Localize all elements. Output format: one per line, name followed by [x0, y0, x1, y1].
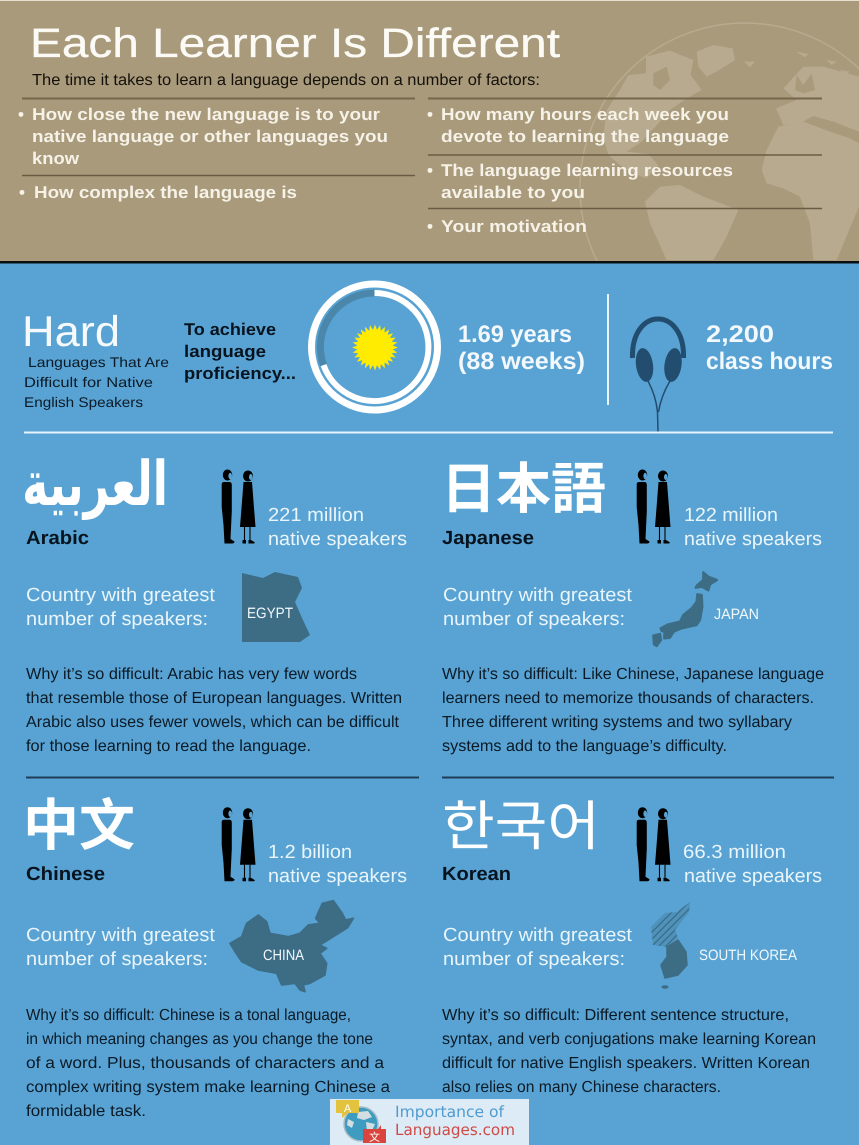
- speaker count: native speakers: [684, 866, 822, 887]
- description: Arabic also uses fewer vowels, which can be difficult: [26, 714, 400, 731]
- country label: Country with greatest: [26, 925, 216, 946]
- country label: [26, 585, 216, 630]
- icon: headphones: [632, 319, 684, 432]
- icon: globe with speech bubbles: A: [344, 1103, 352, 1115]
- description: Why it’s so difficult: Arabic has very few words: [26, 666, 357, 683]
- heading: hard: Difficult for Native: [24, 374, 153, 390]
- stat: years: [458, 321, 585, 375]
- stat: class hours: class hours: [706, 348, 833, 375]
- list: right factors: •: [427, 105, 433, 124]
- description: learners need to memorize thousands of characters.: [442, 690, 814, 707]
- description: Why it’s so difficult: Like Chinese, Japanese language: [442, 666, 824, 683]
- heading: hard: Languages That Are: [28, 354, 169, 370]
- description: [26, 666, 402, 755]
- country label: number of speakers:: [26, 949, 208, 970]
- language name: Arabic: [26, 528, 89, 549]
- heading: hard: English Speakers: [24, 394, 143, 410]
- speaker count: 66.3 million: [683, 842, 786, 863]
- language name: Chinese: [26, 864, 105, 885]
- panel: korean: [442, 782, 822, 1096]
- title: Each Learner Is Different: [30, 20, 561, 66]
- list: right factors: Your motivation: [441, 217, 587, 236]
- country label: [443, 925, 633, 970]
- description: syntax, and verb conjugations make learning Korean: [442, 1031, 816, 1048]
- speaker count: [684, 505, 822, 550]
- list: right factors: The language learning resources: [441, 161, 733, 180]
- list: left factors: native language or other languages you: [32, 127, 388, 146]
- map: korea: [651, 902, 797, 989]
- map: japan: JAPAN: [714, 606, 759, 623]
- panel: chinese: [23, 781, 407, 1120]
- country label: Country with greatest: [443, 925, 633, 946]
- icon: people: [637, 470, 670, 544]
- language name: Korean: [442, 864, 511, 885]
- country label: Country with greatest: [443, 585, 633, 606]
- country label: [443, 585, 633, 630]
- icon: globe watermark: [579, 22, 859, 261]
- heading: arabic script: العربية: [22, 449, 168, 520]
- list: right factors: •: [427, 217, 433, 236]
- country label: number of speakers:: [26, 609, 208, 630]
- list: right factors: How many hours each week you: [441, 105, 729, 124]
- list: right factors: [427, 105, 733, 236]
- list: left factors: How complex the language is: [34, 183, 297, 202]
- description: [442, 1007, 816, 1096]
- chart: progress ring with sun: [312, 284, 438, 410]
- panel: japanese: [441, 444, 824, 755]
- icon: people: [222, 470, 256, 544]
- logo: importance of languages: Importance of: [395, 1103, 505, 1121]
- panel: hard languages background: [0, 261, 859, 1145]
- text: to achieve language proficiency: language: [184, 342, 266, 361]
- text: to achieve language proficiency: To achieve: [184, 320, 276, 339]
- icon: globe with speech bubbles: [336, 1100, 386, 1145]
- icon: globe with speech bubbles: 文: [369, 1129, 380, 1145]
- description: Why it’s so difficult: Different sentence structure,: [442, 1007, 789, 1024]
- description: Why it’s so difficult: Chinese is a tonal language,: [26, 1007, 351, 1024]
- list: right factors: •: [427, 161, 433, 180]
- stat: years: 1.69 years: [458, 321, 572, 348]
- heading: chinese script: 中文: [23, 781, 135, 862]
- description: that resemble those of European languages. Written: [26, 690, 402, 707]
- stat: class hours: [706, 321, 833, 375]
- map: japan: [653, 572, 759, 646]
- description: [26, 1007, 390, 1120]
- speaker count: 122 million: [684, 505, 778, 526]
- heading: hard: Hard: [22, 308, 120, 356]
- description: also relies on many Chinese characters.: [442, 1079, 721, 1096]
- description: formidable task.: [26, 1103, 146, 1120]
- country label: number of speakers:: [443, 949, 625, 970]
- list: right factors: available to you: [441, 183, 585, 202]
- icon: people: [637, 807, 670, 881]
- speaker count: 1.2 billion: [268, 842, 352, 863]
- intro sentence: The time it takes to learn a language depends on a number of factors:: [32, 72, 540, 89]
- description: systems add to the language’s difficulty.: [442, 738, 727, 755]
- icon: sun: [352, 324, 398, 370]
- country label: Country with greatest: [26, 585, 216, 606]
- speaker count: native speakers: [268, 866, 407, 887]
- heading: korean script: 한국어: [442, 782, 600, 861]
- map: china: [230, 901, 353, 992]
- description: difficult for native English speakers. Written Korean: [442, 1055, 810, 1072]
- logo: importance of languages: Languages.com: [395, 1121, 515, 1139]
- text: to achieve language proficiency: [184, 320, 296, 383]
- list: left factors: •: [18, 105, 24, 124]
- country label: [26, 925, 216, 970]
- description: in which meaning changes as you change the tone: [26, 1031, 373, 1048]
- description: complex writing system make learning Chinese a: [26, 1079, 390, 1096]
- speaker count: native speakers: [268, 529, 407, 550]
- description: [442, 666, 824, 755]
- map: china: CHINA: [263, 947, 304, 964]
- speaker count: [683, 842, 822, 887]
- text: to achieve language proficiency: proficiency...: [184, 364, 296, 383]
- panel: arabic: [22, 449, 407, 755]
- speaker count: 221 million: [268, 505, 364, 526]
- stat: years: (88 weeks): [458, 348, 585, 375]
- stat: class hours: 2,200: [706, 321, 774, 348]
- list: right factors: devote to learning the language: [441, 127, 729, 146]
- description: for those learning to read the language.: [26, 738, 311, 755]
- logo: importance of languages: [330, 1099, 529, 1145]
- heading: japanese script: 日本語: [441, 444, 606, 524]
- list: left factors: know: [32, 149, 80, 168]
- panel: each learner is different: [0, 0, 859, 261]
- map: egypt: [242, 572, 310, 642]
- description: Three different writing systems and two syllabary: [442, 714, 792, 731]
- speaker count: [268, 505, 407, 550]
- description: of a word. Plus, thousands of characters and a: [26, 1055, 384, 1072]
- list: left factors: How close the new language is to your: [32, 105, 380, 124]
- list: left factors: [18, 105, 388, 202]
- map: korea: SOUTH KOREA: [699, 947, 797, 964]
- speaker count: [268, 842, 407, 887]
- heading: hard: [22, 308, 169, 410]
- country label: number of speakers:: [443, 609, 625, 630]
- map: egypt: EGYPT: [247, 605, 293, 622]
- list: left factors: •: [19, 183, 25, 202]
- speaker count: native speakers: [684, 529, 822, 550]
- icon: people: [222, 807, 256, 881]
- language name: Japanese: [442, 528, 534, 549]
